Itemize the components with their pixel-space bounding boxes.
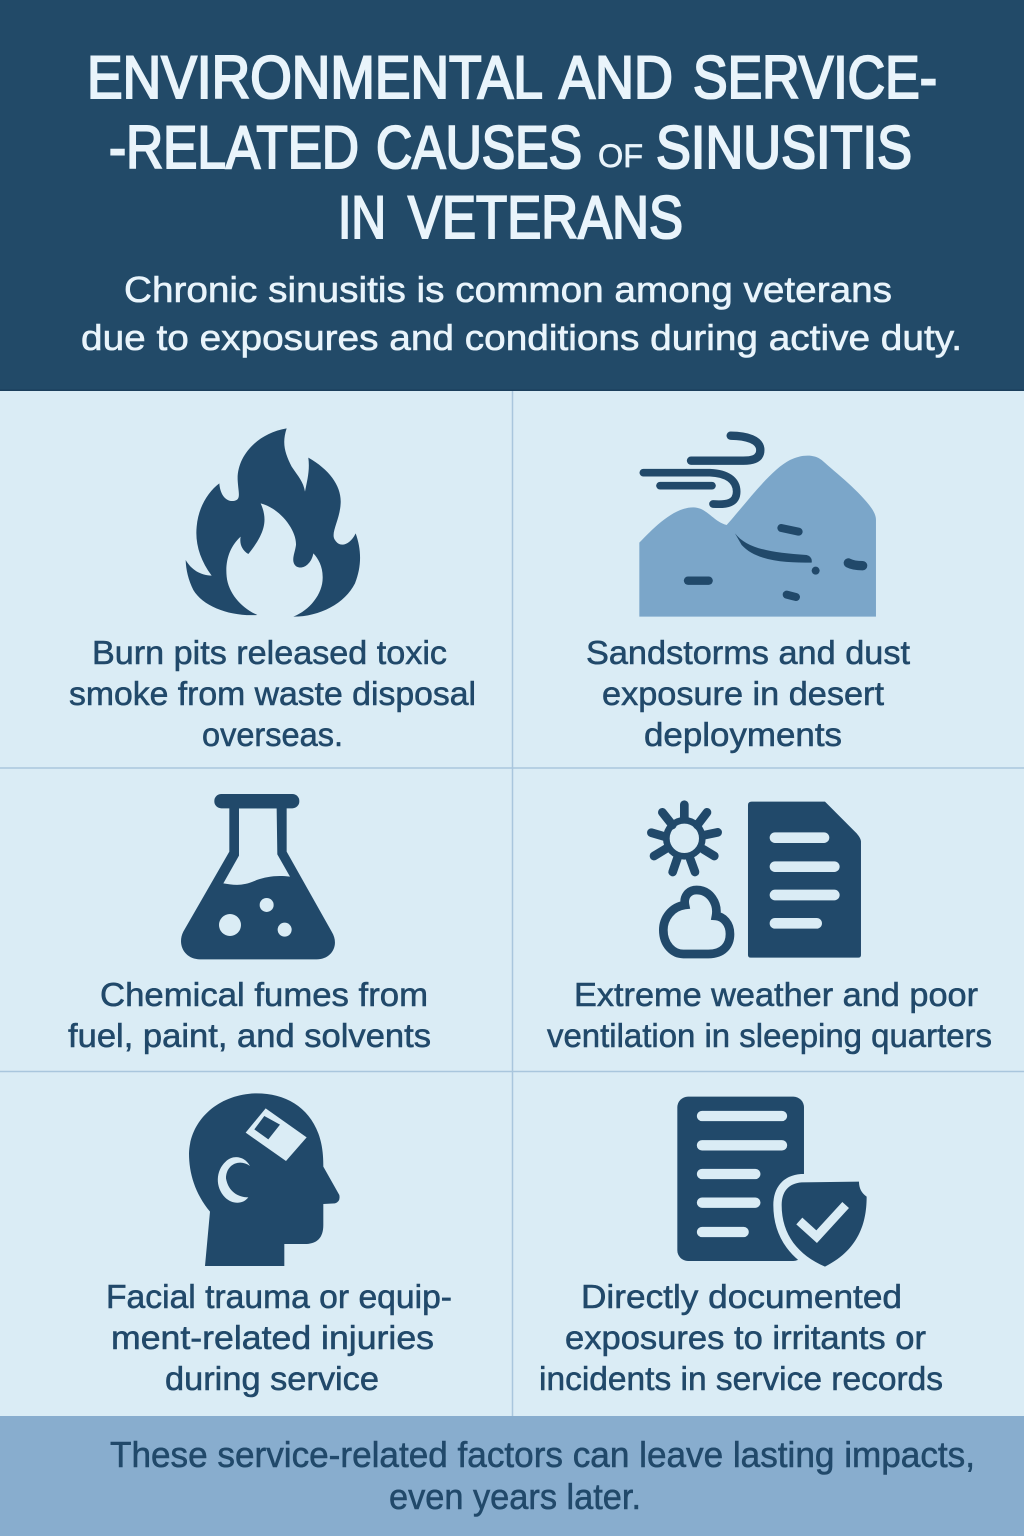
text: extreme weather: ventilation in sleeping quarters: [547, 1017, 992, 1054]
text: chemical fumes: Chemical fumes from: [100, 976, 428, 1013]
footer text: even years later.: [389, 1476, 641, 1517]
title: CAUSES: [376, 114, 582, 181]
text: burn pits: [69, 634, 476, 753]
title: SERVICE-: [693, 44, 937, 111]
icon: head with injury: [189, 1093, 340, 1266]
text: sandstorms: deployments: [644, 716, 842, 753]
header banner: [0, 0, 1024, 391]
text: sandstorms: [586, 634, 910, 753]
text: chemical fumes: [68, 976, 431, 1054]
icon: sun, cloud and document: [651, 802, 861, 958]
text: sandstorms: Sandstorms and dust: [586, 634, 910, 671]
text: service records: incidents in service records: [539, 1360, 943, 1397]
icon: dunes and wind: [639, 436, 876, 617]
title: VETERANS: [408, 184, 683, 251]
panel: sandstorms: [586, 436, 910, 753]
title: SINUSITIS: [656, 114, 912, 181]
text: burn pits: smoke from waste disposal: [69, 675, 476, 712]
text: facial trauma: ment-related injuries: [111, 1319, 434, 1356]
panel: chemical fumes: [68, 794, 431, 1054]
title: [87, 44, 937, 251]
footer text: These service-related factors can leave lasting impacts,: [110, 1434, 975, 1475]
panel: service records: [539, 1097, 943, 1397]
text: extreme weather: Extreme weather and poor: [574, 976, 978, 1013]
text: facial trauma: Facial trauma or equip-: [106, 1278, 452, 1315]
icon: document with shield: [677, 1097, 867, 1267]
text: extreme weather: [547, 976, 992, 1054]
footer text: [110, 1434, 975, 1517]
text: burn pits: overseas.: [202, 716, 343, 753]
panel: facial trauma: [106, 1093, 452, 1397]
text: facial trauma: [106, 1278, 452, 1397]
title: IN: [338, 184, 386, 251]
panel: burn pits: [69, 428, 476, 753]
text: burn pits: Burn pits released toxic: [92, 634, 447, 671]
text: service records: exposures to irritants or: [565, 1319, 926, 1356]
icon: flask: [181, 794, 335, 959]
text: chemical fumes: fuel, paint, and solvents: [68, 1017, 431, 1054]
title: AND: [559, 44, 673, 111]
text: sandstorms: exposure in desert: [602, 675, 884, 712]
panel: extreme weather: [547, 802, 992, 1054]
icon: flame: [186, 428, 360, 617]
text: service records: [539, 1278, 943, 1397]
subtitle: Chronic sinusitis is common among veterans: [124, 269, 892, 310]
title: OF: [598, 138, 643, 174]
text: facial trauma: during service: [165, 1360, 379, 1397]
title: ENVIRONMENTAL: [87, 44, 543, 111]
footer banner: [0, 1416, 1024, 1536]
text: service records: Directly documented: [581, 1278, 902, 1315]
title: -RELATED: [109, 114, 359, 181]
subtitle: due to exposures and conditions during active duty.: [81, 317, 962, 358]
subtitle: [81, 269, 962, 358]
